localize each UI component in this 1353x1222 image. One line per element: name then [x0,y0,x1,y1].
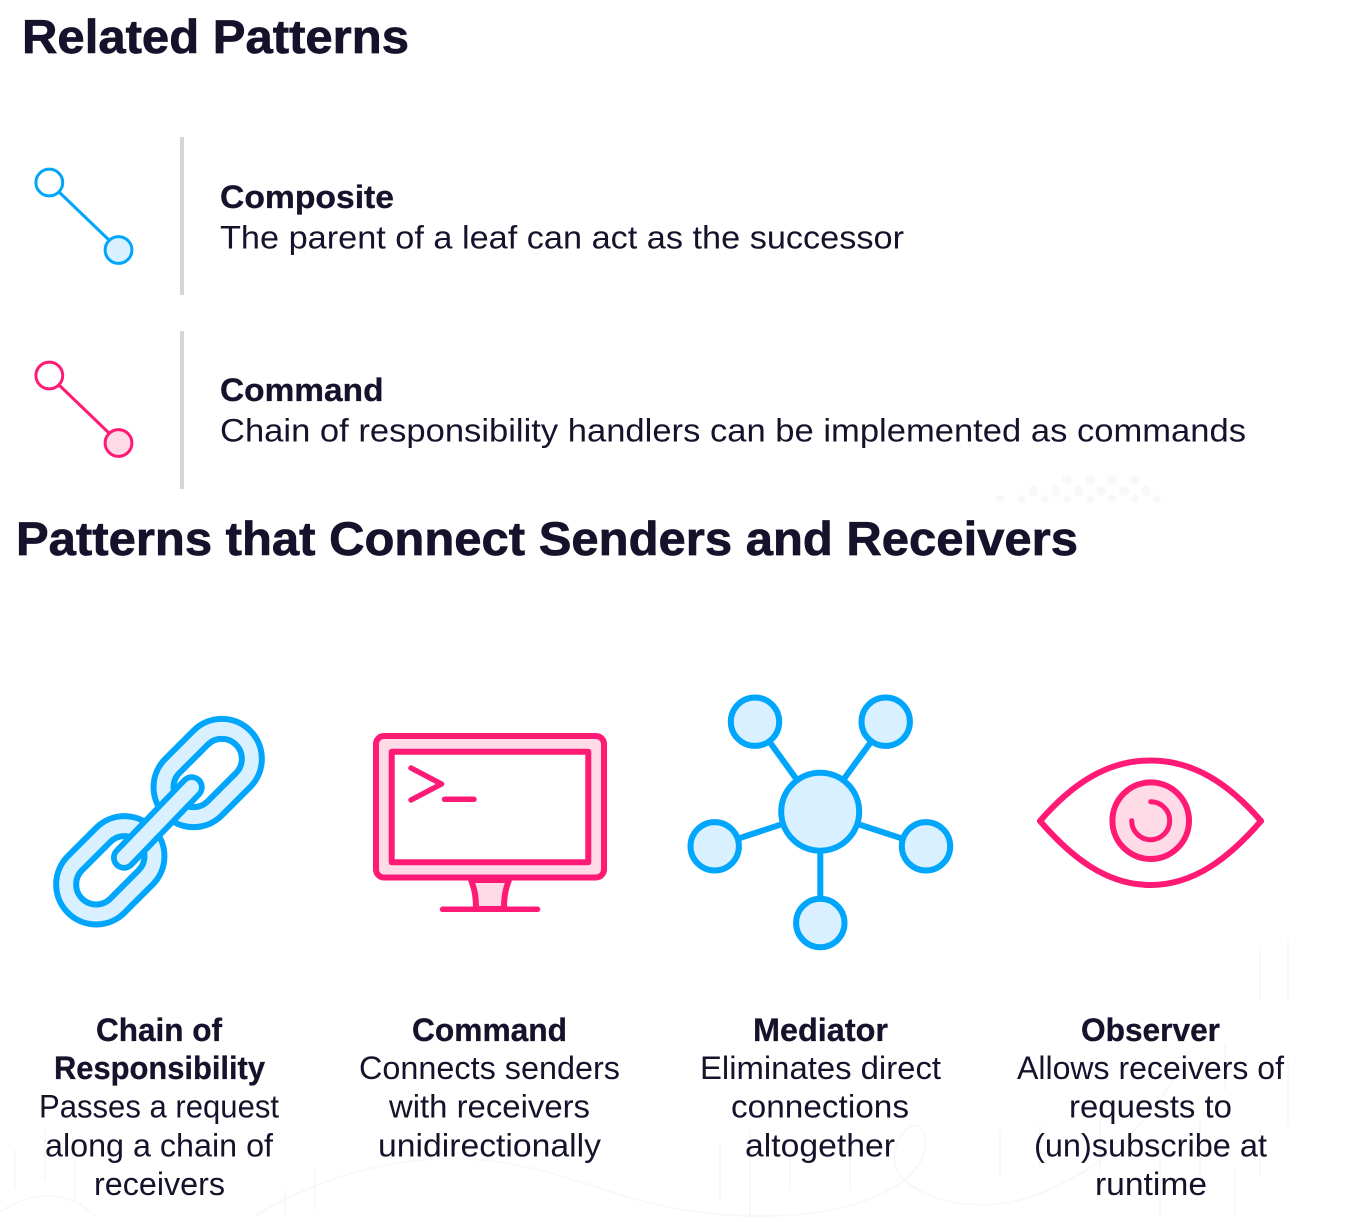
text: Composite description: The parent of a leaf can act as the successor [220,220,904,256]
panel: Command [359,736,620,1164]
icon: hub network [690,698,950,947]
text: Command description [220,372,1246,448]
icon: blue connector nodes [36,169,132,263]
text: Chain of Responsibility description: Passes a request [39,1088,279,1124]
text: Mediator description [700,1012,941,1164]
icon: terminal monitor [376,736,604,909]
panel: Mediator [690,698,950,1164]
text: Chain of Responsibility description: receivers [94,1166,225,1202]
text: Observer description: runtime [1095,1166,1207,1202]
title: Related Patterns: Related Patterns [22,10,409,63]
icon: pink connector nodes [36,362,132,456]
panel: Observer [1017,760,1284,1202]
panel: Chain of Responsibility [39,702,279,1202]
text: Command description: with receivers [388,1088,590,1124]
text: Command description: unidirectionally [378,1128,601,1164]
text: Chain of Responsibility description [39,1012,279,1202]
text: Composite description [220,179,904,256]
icon: eye [1040,760,1261,885]
text: Command description: Connects senders [359,1050,620,1086]
text: Observer description: Allows receivers of [1017,1050,1284,1086]
text: Mediator description: connections [731,1088,909,1124]
text: Chain of Responsibility description: Responsibility [54,1050,265,1086]
text: Command description: Chain of responsibility handlers can be implemented as commands [220,412,1246,448]
text: Command description: Command [220,372,384,408]
panel: Command row [36,331,1246,489]
text: Mediator description: Eliminates direct [700,1050,941,1086]
panel: Composite row [36,137,904,295]
text: Composite description: Composite [220,179,394,215]
text: Mediator description: Mediator [753,1012,888,1048]
text: Command description: Command [412,1012,567,1048]
text: Chain of Responsibility description: Chain of [96,1012,222,1048]
text: Mediator description: altogether [745,1128,895,1164]
icon: chain links [40,702,278,941]
text: Observer description: Observer [1081,1012,1220,1048]
text: Observer description [1017,1012,1284,1202]
text: Command description [359,1012,620,1164]
heading: Patterns that Connect Senders and Receivers: Patterns that Connect Senders and Receivers [16,512,1078,565]
text: Chain of Responsibility description: along a chain of [45,1128,273,1164]
text: Observer description: (un)subscribe at [1034,1128,1267,1164]
text: Observer description: requests to [1069,1088,1232,1124]
